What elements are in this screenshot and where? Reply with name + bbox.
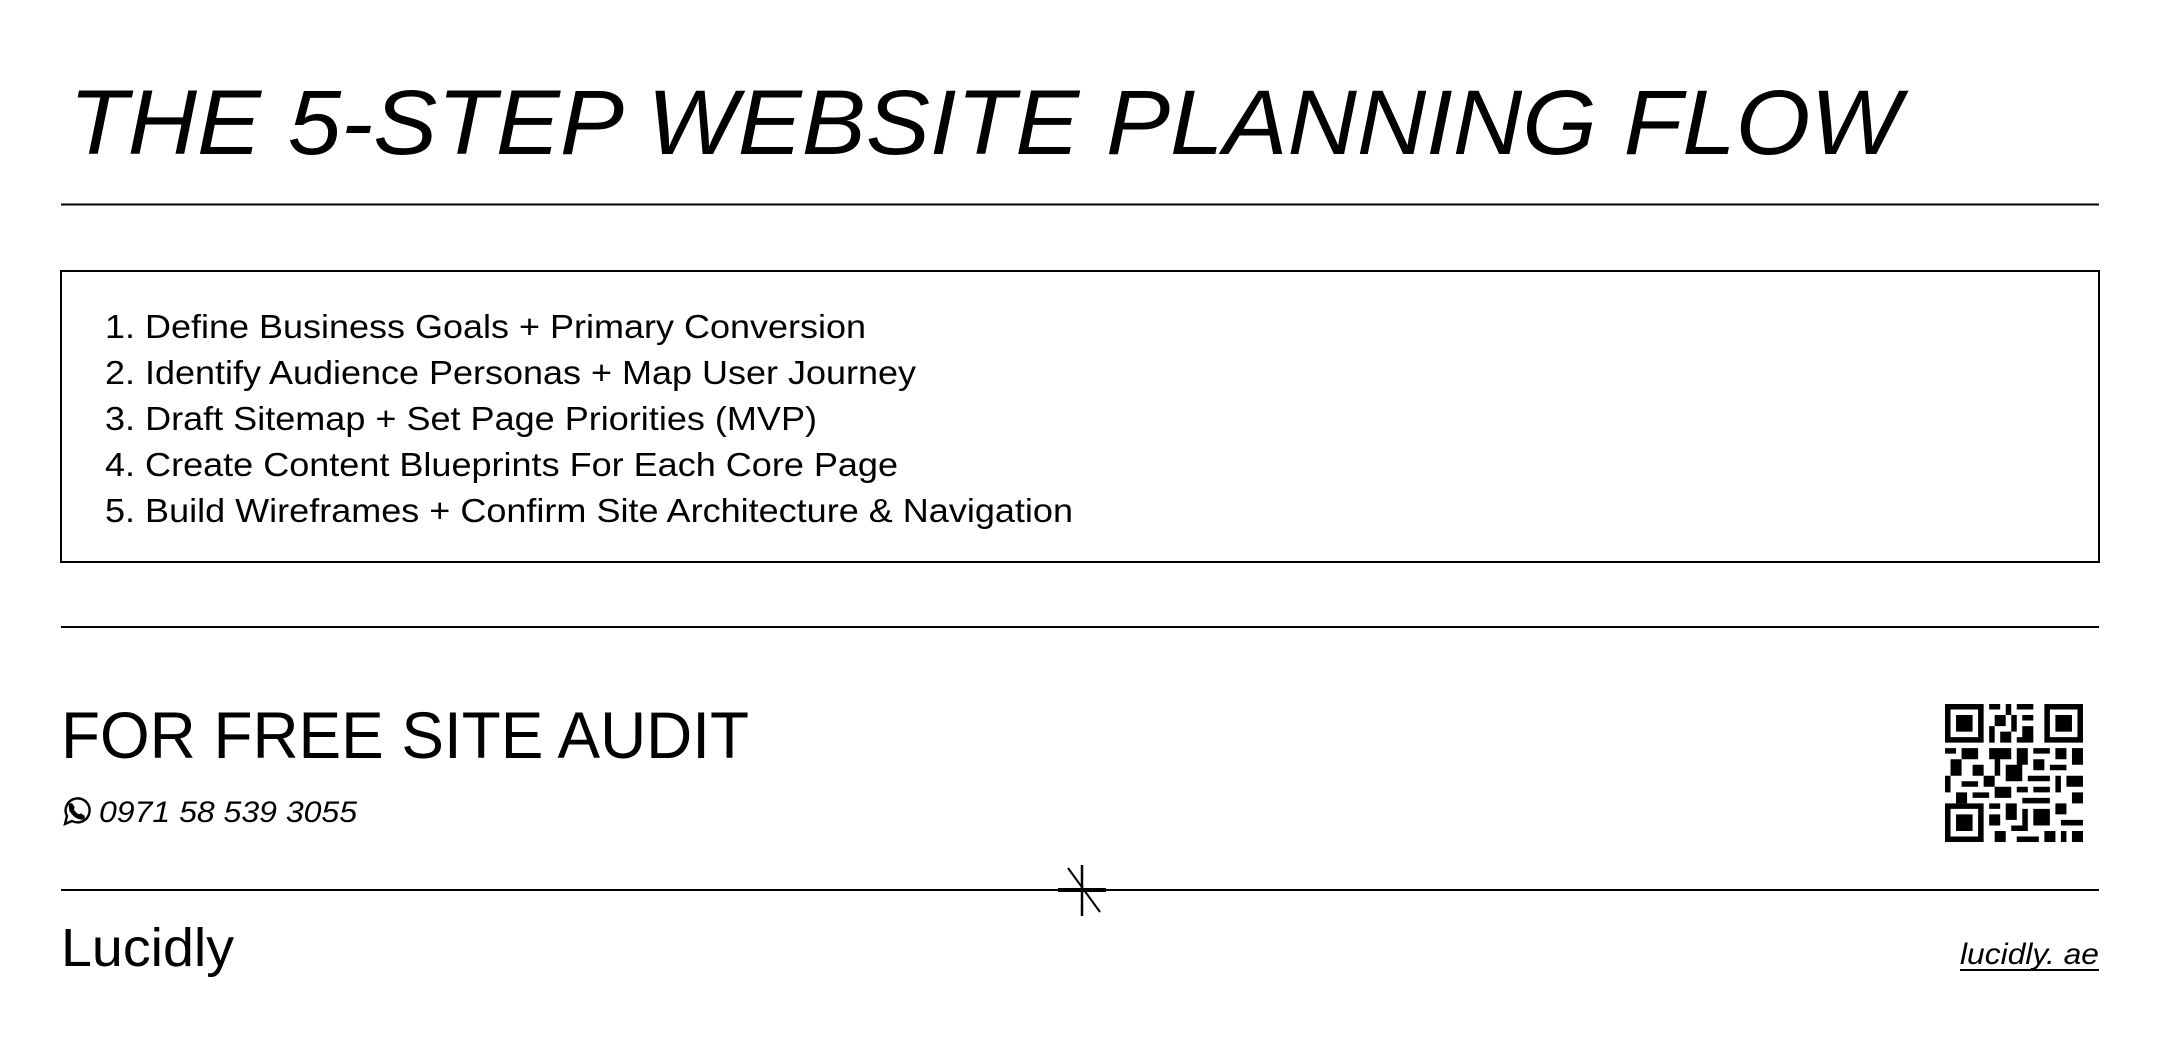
- step 2: 2. Identify Audience Personas + Map User Journey: [105, 354, 917, 391]
- step 3: 3. Draft Sitemap + Set Page Priorities (MVP): [105, 400, 817, 437]
- heading: free site audit: FOR FREE SITE AUDIT: [61, 698, 749, 772]
- icon: QR code: [1945, 704, 2083, 842]
- link: lucidly.ae: lucidly. ae: [1960, 938, 2099, 971]
- step 1: 1. Define Business Goals + Primary Conversion: [105, 308, 866, 345]
- phone number: 0971 58 539 3055: [99, 796, 357, 829]
- title: THE 5-STEP WEBSITE PLANNING FLOW: [69, 72, 1910, 174]
- step 4: 4. Create Content Blueprints For Each Core Page: [105, 446, 898, 483]
- step 5: 5. Build Wireframes + Confirm Site Architecture & Navigation: [105, 492, 1073, 529]
- panel: steps list: [61, 271, 2099, 562]
- icon: whatsapp: [65, 798, 90, 824]
- icon: star mark: [1058, 865, 1106, 916]
- logo: Lucidly: Lucidly: [61, 918, 234, 978]
